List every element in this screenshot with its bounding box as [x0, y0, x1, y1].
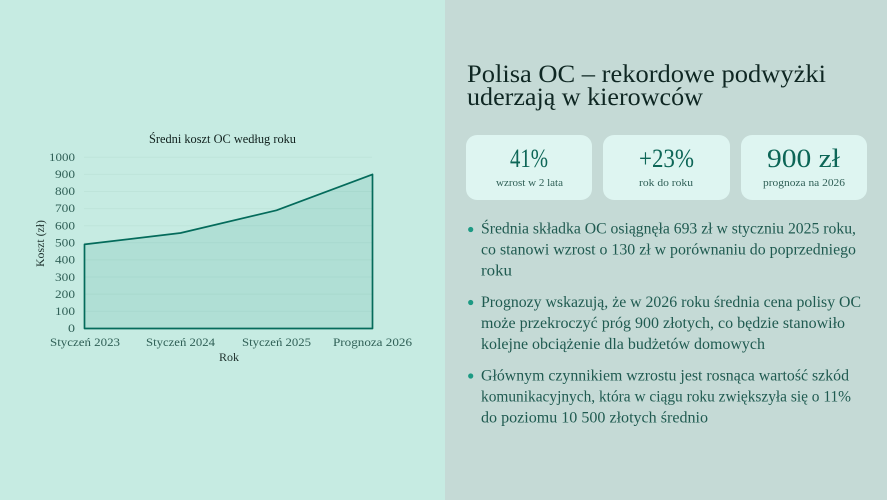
main heading: uderzają w kierowców: [467, 84, 703, 111]
x axis tick labels: Styczeń 2024: [146, 337, 215, 349]
bullet: main growth factor: do poziomu 10 500 złotych średnio: [481, 410, 708, 426]
bullet: 2026 forecast: może przekroczyć próg 900 złotych, co będzie stanowiło: [481, 315, 845, 332]
bullet: 2026 forecast: kolejne obciążenie dla budżetów domowych: [481, 336, 765, 353]
stat card: 900 zł: [741, 135, 867, 200]
bullet: main growth factor: komunikacyjnych, która w ciągu roku zwiększyła się o 11%: [481, 388, 851, 406]
y axis tick labels: 900: [55, 169, 75, 181]
panel: right content background: [445, 0, 887, 500]
bullet: 2026 forecast: [468, 294, 861, 353]
bullet: average premium: Średnia składka OC osiągnęła 693 zł w styczniu 2025 roku,: [481, 220, 856, 238]
stat card: +23%: rok do roku: [639, 178, 694, 189]
chart title: Średni koszt OC według roku: [149, 131, 296, 146]
main heading: [467, 61, 826, 111]
y axis tick labels: 600: [55, 220, 75, 232]
bullet: average premium: roku: [481, 262, 512, 280]
stat card: 900 zł: prognoza na 2026: [763, 178, 845, 189]
stat card: +23%: +23%: [639, 144, 694, 173]
y axis tick labels: [49, 152, 75, 335]
y axis tick labels: 200: [55, 289, 75, 301]
bullet: main growth factor: [468, 368, 851, 426]
stat card: 41%: wzrost w 2 lata: [496, 178, 563, 189]
y axis tick labels: 700: [55, 203, 75, 215]
bullet: average premium: [468, 220, 856, 280]
stat card: 41%: 41%: [510, 144, 548, 173]
x axis tick labels: Prognoza 2026: [333, 337, 412, 349]
y axis tick labels: 800: [55, 186, 75, 198]
y axis tick labels: 1000: [49, 152, 75, 164]
y axis tick labels: 500: [55, 238, 75, 250]
x axis tick labels: Styczeń 2025: [242, 337, 311, 349]
chart area and line: [84, 174, 372, 328]
x axis tick labels: [50, 337, 412, 349]
main heading: Polisa OC – rekordowe podwyżki: [467, 61, 826, 88]
bullet: average premium: co stanowi wzrost o 130 zł w porównaniu do poprzedniego: [481, 242, 856, 258]
panel: left chart background: [0, 0, 445, 500]
area chart: average OC cost by year: [35, 131, 412, 364]
y axis tick labels: 0: [68, 323, 75, 335]
y axis title: Koszt (zł): [35, 220, 47, 267]
stat card: 41%: [466, 135, 592, 200]
bullet: 2026 forecast: Prognozy wskazują, że w 2026 roku średnia cena polisy OC: [481, 294, 861, 311]
y axis tick labels: 300: [55, 272, 75, 284]
stat card: +23%: [603, 135, 730, 200]
x axis tick labels: Styczeń 2023: [50, 337, 120, 349]
bullet: main growth factor: Głównym czynnikiem wzrostu jest rosnąca wartość szkód: [481, 368, 849, 384]
stat card: 900 zł: 900 zł: [767, 144, 841, 173]
y axis tick labels: 100: [55, 306, 75, 318]
x axis title: Rok: [219, 352, 239, 364]
y axis tick labels: 400: [55, 254, 75, 266]
